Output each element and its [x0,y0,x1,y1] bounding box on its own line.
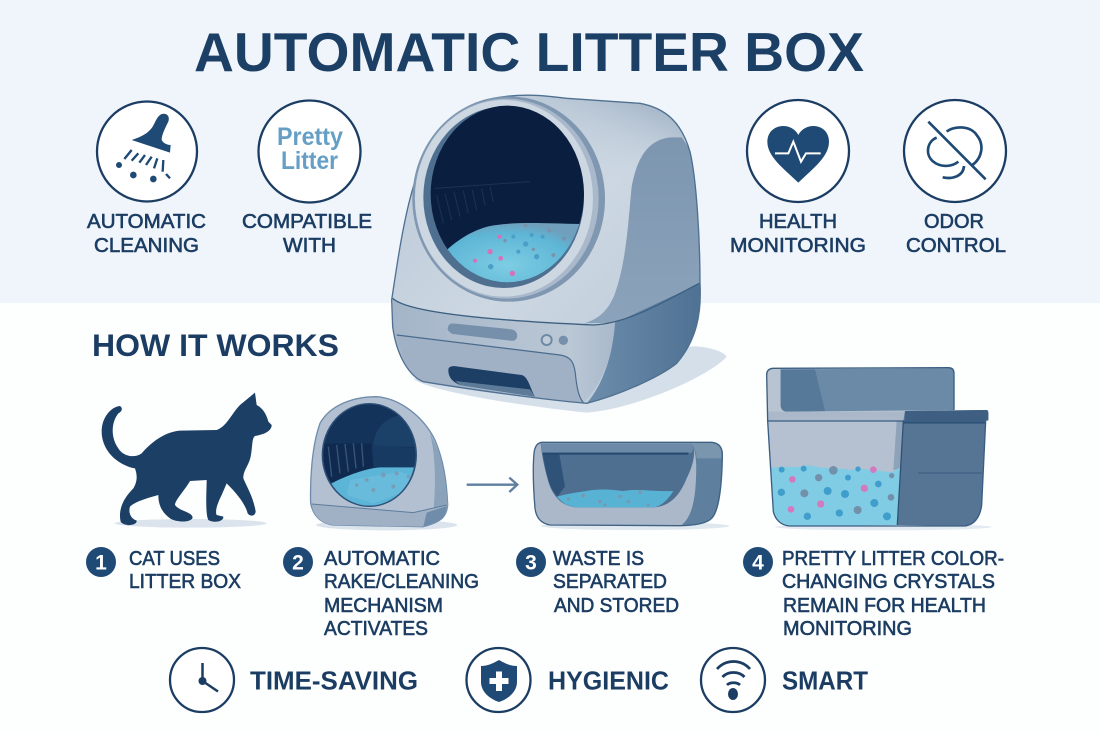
heading: how it works: HOW IT WORKS [92,327,339,363]
step 1 caption [86,547,241,593]
label: automatic cleaning [87,211,206,257]
label: odor control: CONTROL [906,235,1006,257]
step 2 illustration: open unit with rake [311,397,457,530]
step 4 caption: REMAIN FOR HEALTH [783,595,986,617]
step 3 illustration: waste tray [533,442,729,530]
step 4 caption: MONITORING [783,618,912,640]
step 3 caption: SEPARATED [553,571,667,593]
feature: compatible with Pretty Litter [242,100,372,257]
step number 3: 3 [525,552,537,574]
feature: health monitoring [730,100,866,257]
step number 4: 4 [752,552,764,574]
step 4 caption: PRETTY LITTER COLOR- [782,548,1004,570]
step 1 caption: CAT USES [129,548,220,570]
step 2 caption: ACTIVATES [324,618,428,640]
label: compatible with [242,211,372,257]
label: health monitoring: HEALTH [759,211,837,233]
step 1 illustration: cat [102,393,272,528]
step number 2: 2 [292,552,304,574]
feature: automatic cleaning [87,102,206,257]
icon: clock [170,648,234,712]
icon: Pretty Litter logo [258,100,360,202]
icon: odor crossed out [904,100,1006,202]
step number 3 [516,547,546,577]
icon: Pretty Litter logo: Litter [281,147,338,175]
step number 2 [283,547,313,577]
step 4 caption: CHANGING CRYSTALS [782,571,995,593]
benefit: smart: SMART [782,666,868,696]
step 4 illustration: cross-section of bin with crystals [767,368,992,530]
step 3 caption: AND STORED [554,595,679,617]
top background band [0,0,1100,303]
label: compatible with: WITH [283,235,336,257]
step 2 caption: MECHANISM [324,595,443,617]
label: odor control: ODOR [924,211,984,233]
benefit: smart [701,648,868,712]
benefit: time-saving [170,648,418,712]
step 3 caption: WASTE IS [553,548,644,570]
label: odor control [906,211,1006,257]
title: AUTOMATIC LITTER BOX [194,21,864,83]
step number 1 [86,547,116,577]
step 4 caption [743,547,1004,640]
feature: odor control [904,100,1006,257]
icon: wifi [701,648,765,712]
step number 4 [743,547,773,577]
main automatic litter box illustration [392,95,727,413]
label: automatic cleaning: AUTOMATIC [87,211,206,233]
label: health monitoring: MONITORING [730,235,866,257]
icon: shield with cross [466,648,530,712]
step 2 caption: RAKE/CLEANING [324,571,479,593]
step number 1: 1 [95,552,107,574]
benefit: hygienic [466,648,669,712]
step 1 caption: LITTER BOX [129,571,241,593]
step 2 caption [283,547,479,640]
arrow between step 2 and step 3 [467,478,517,492]
icon: Pretty Litter logo: Pretty [277,123,343,151]
benefit: time-saving: TIME-SAVING [250,666,418,696]
label: health monitoring [730,211,866,257]
icon: squeegee [97,102,197,202]
step 2 caption: AUTOMATIC [324,548,440,570]
icon: heart with pulse [747,100,849,202]
benefit: hygienic: HYGIENIC [548,666,669,696]
step 3 caption [516,547,679,617]
label: automatic cleaning: CLEANING [94,235,199,257]
label: compatible with: COMPATIBLE [242,211,372,233]
